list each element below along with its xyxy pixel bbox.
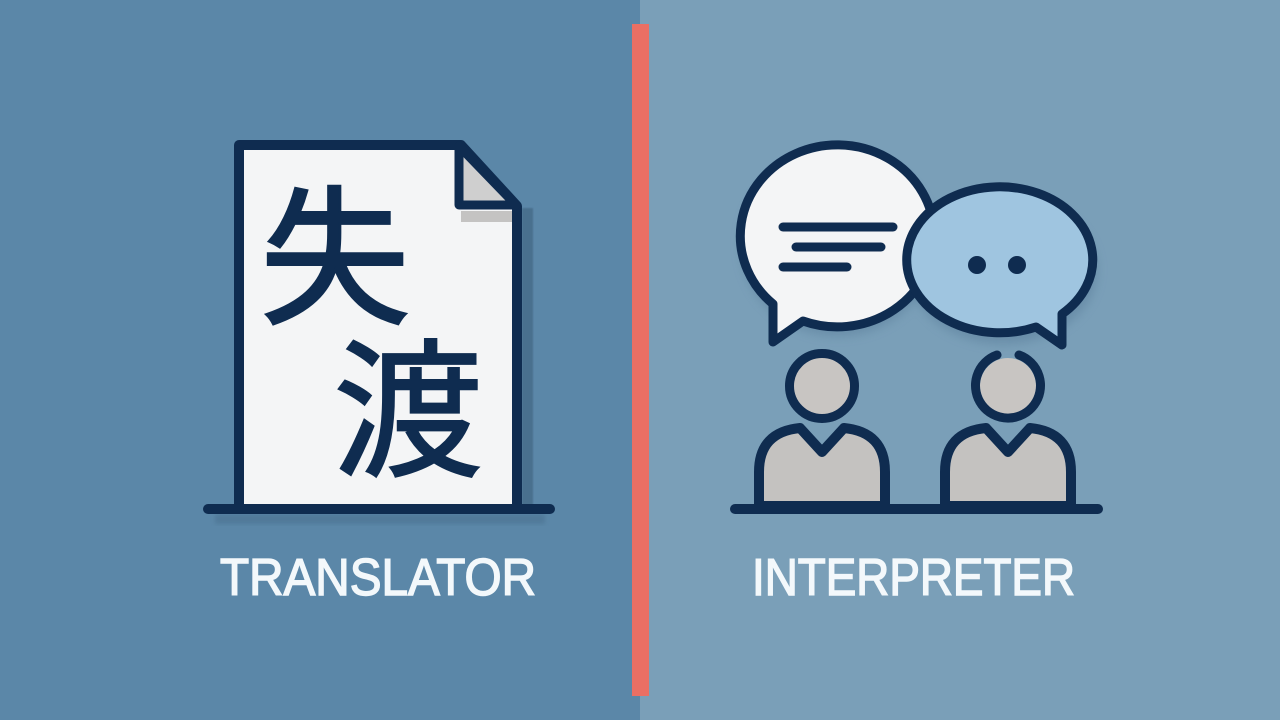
document page bbox=[239, 145, 517, 509]
divider: coral vertical bar bbox=[632, 24, 649, 696]
icon: document with characters bbox=[203, 145, 555, 524]
speech bubble: blue with dots bbox=[907, 187, 1093, 345]
panel: translator background bbox=[0, 0, 640, 720]
page fold bbox=[459, 146, 516, 222]
character: lower glyph: 渡 bbox=[333, 329, 483, 497]
document shadow bbox=[215, 208, 545, 524]
conversation baseline bbox=[730, 504, 1103, 514]
person: right bbox=[945, 355, 1071, 506]
label: translator: TRANSLATOR bbox=[220, 549, 536, 607]
character: upper glyph: 失 bbox=[260, 176, 410, 344]
bubble shadows bbox=[741, 152, 1097, 344]
person: left bbox=[759, 354, 885, 506]
label: interpreter: INTERPRETER bbox=[752, 549, 1075, 607]
document baseline bbox=[203, 504, 555, 514]
speech bubble: white with text lines bbox=[740, 145, 934, 342]
icon: two people in conversation bbox=[730, 145, 1103, 514]
panel: interpreter background bbox=[640, 0, 1280, 720]
